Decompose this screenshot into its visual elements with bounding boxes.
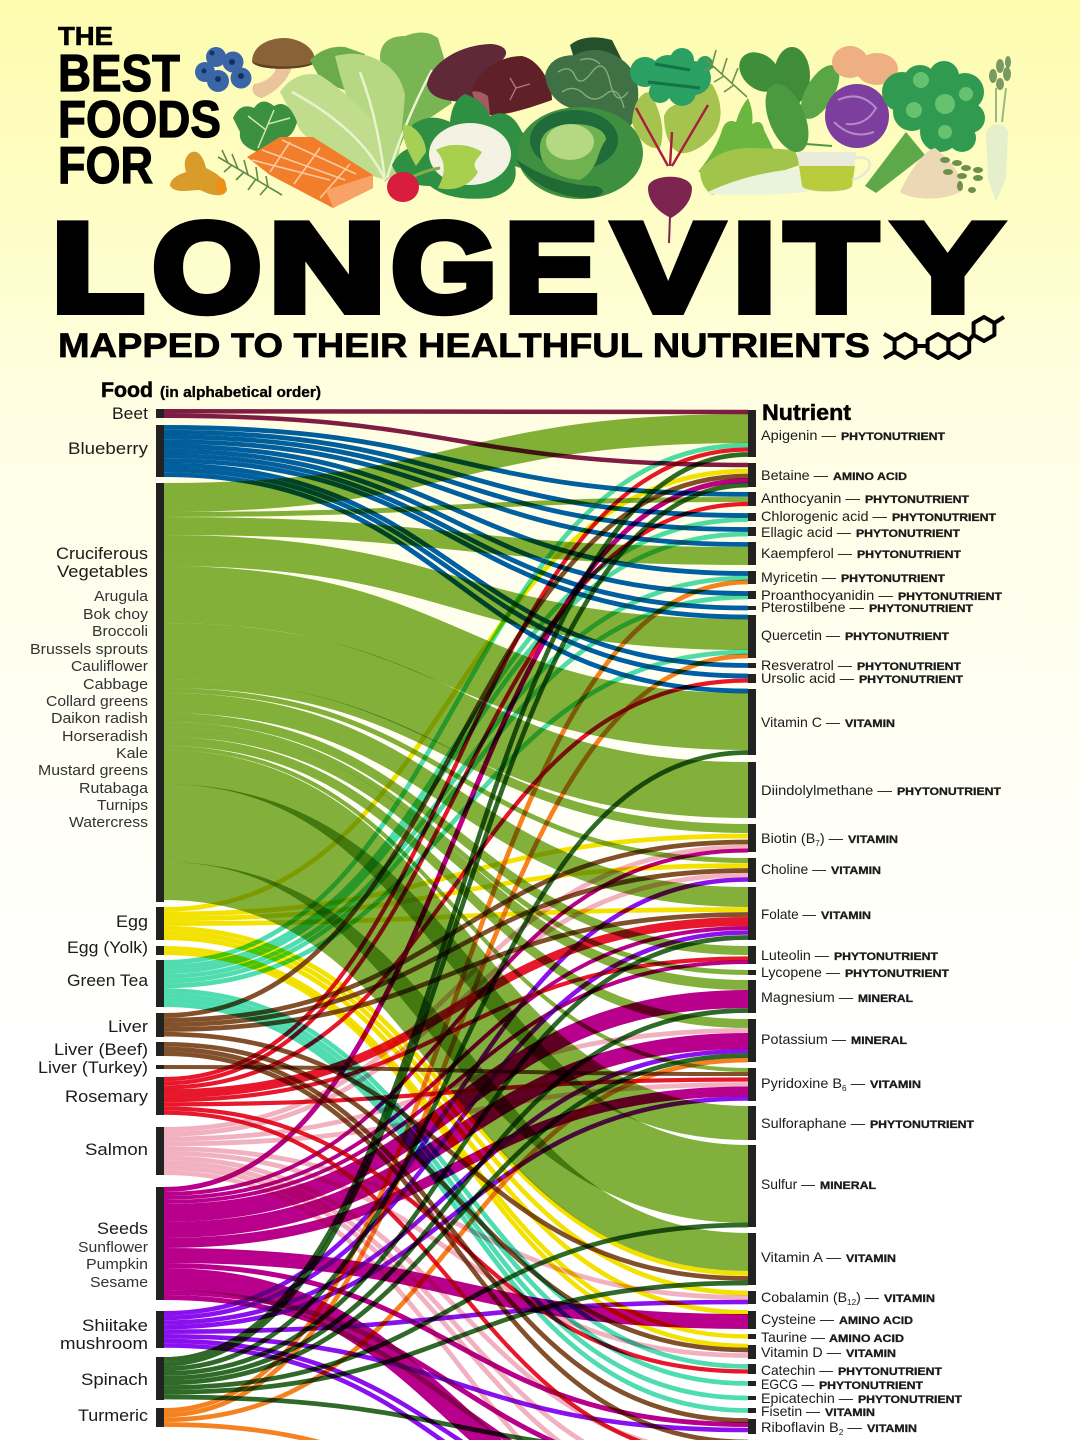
food labels: Broccoli: [92, 623, 148, 640]
nutrient labels: VITAMIN: [831, 865, 881, 877]
nutrient labels: Betaine —: [761, 467, 828, 483]
nutrient labels: —: [847, 1075, 865, 1091]
title: longevity: V: [614, 197, 722, 338]
nutrient labels: PHYTONUTRIENT: [841, 573, 945, 585]
nutrient labels: AMINO ACID: [833, 471, 907, 483]
food labels: Vegetables: [57, 563, 148, 581]
icon: eggs: [832, 46, 898, 85]
nutrient labels: VITAMIN: [867, 1423, 917, 1435]
nutrient labels: VITAMIN: [846, 1348, 896, 1360]
food labels: Daikon radish: [51, 710, 148, 727]
food labels: Horseradish: [62, 728, 148, 745]
title: longevity: T: [785, 197, 877, 338]
nutrient labels: VITAMIN: [848, 834, 898, 846]
nutrient labels: Sulforaphane —: [761, 1115, 865, 1131]
food labels: [30, 405, 149, 1425]
food labels: Cabbage: [83, 676, 148, 693]
nutrient labels: Ellagic acid —: [761, 524, 851, 540]
nutrient labels: Diindolylmethane —: [761, 782, 892, 798]
nutrient labels: ) —: [820, 830, 843, 846]
icon: spinach: [731, 44, 847, 158]
nutrient labels: PHYTONUTRIENT: [865, 494, 969, 506]
nutrient labels: AMINO ACID: [829, 1333, 904, 1345]
icon: blueberries: [195, 47, 252, 92]
icon: seeds: [900, 148, 983, 199]
food labels: Egg (Yolk): [67, 939, 148, 957]
food labels: Kale: [116, 745, 148, 762]
nutrient labels: ) —: [856, 1289, 879, 1305]
nutrient labels: Vitamin A —: [761, 1249, 841, 1265]
title: longevity: E: [505, 197, 598, 338]
food labels: Spinach: [81, 1371, 148, 1389]
nutrient labels: Kaempferol —: [761, 545, 852, 561]
title: the best foods for: THE: [58, 21, 113, 51]
nutrient labels: PHYTONUTRIENT: [857, 549, 961, 561]
food node bars: [156, 409, 164, 1427]
icon: brussels sprouts: [630, 48, 713, 106]
food labels: Rutabaga: [79, 780, 149, 797]
food labels: Sesame: [90, 1274, 148, 1291]
sankey diagram: food to nutrient flows: [164, 411, 748, 1440]
flows: egg yolk: [164, 948, 748, 1346]
nutrient labels: MINERAL: [851, 1035, 907, 1047]
food labels: Liver: [108, 1018, 149, 1036]
column heading: nutrient: Nutrient: [762, 400, 852, 425]
nutrient labels: Cysteine —: [761, 1311, 834, 1327]
nutrient labels: PHYTONUTRIENT: [859, 674, 963, 686]
icon: kale: [233, 101, 297, 152]
nutrient labels: PHYTONUTRIENT: [869, 603, 973, 615]
icon: lettuce: [280, 32, 452, 182]
nutrient labels: PHYTONUTRIENT: [898, 591, 1002, 603]
food labels: Liver (Turkey): [38, 1059, 148, 1077]
icon: broccoli: [865, 61, 985, 193]
nutrient labels: Folate —: [761, 906, 816, 922]
nutrient labels: Myricetin —: [761, 569, 836, 585]
food labels: Collard greens: [46, 693, 148, 710]
nutrient labels: 6: [842, 1084, 847, 1093]
nutrient labels: 7: [815, 839, 820, 848]
nutrient labels: VITAMIN: [870, 1079, 921, 1091]
nutrient labels: Magnesium —: [761, 989, 853, 1005]
nutrient labels: PHYTONUTRIENT: [858, 1394, 962, 1406]
icon: salmon: [247, 137, 373, 208]
icon: daikon: [986, 56, 1011, 202]
title: the best foods for: [58, 21, 221, 195]
title: longevity: L: [52, 197, 144, 338]
flows: cruciferous vegetables: [164, 428, 748, 1252]
flows: shiitake mushroom: [164, 880, 748, 1440]
icon: molecule: [884, 317, 1004, 358]
icon: napa cabbage: [700, 148, 807, 195]
food labels: Green Tea: [67, 972, 149, 990]
nutrient labels: PHYTONUTRIENT: [857, 661, 961, 673]
nutrient labels: Luteolin —: [761, 947, 829, 963]
food labels: Mustard greens: [38, 762, 148, 779]
nutrient labels: PHYTONUTRIENT: [838, 1366, 942, 1378]
nutrient labels: Biotin (B: [761, 830, 814, 846]
flows: blueberry: [164, 427, 748, 691]
flows: egg: [164, 471, 748, 1312]
title: longevity: G: [391, 197, 497, 338]
nutrient labels: Chlorogenic acid —: [761, 508, 887, 524]
icon: rosemary sprig: [703, 50, 747, 97]
nutrient labels: VITAMIN: [884, 1293, 935, 1305]
nutrient labels: Fisetin —: [761, 1403, 820, 1419]
nutrient labels: Potassium —: [761, 1031, 846, 1047]
nutrient labels: Catechin —: [761, 1362, 833, 1378]
food labels: Turnips: [97, 797, 148, 814]
food labels: Brussels sprouts: [30, 641, 148, 658]
food labels: Watercress: [69, 814, 148, 831]
nutrient labels: Epicatechin —: [761, 1390, 853, 1406]
title: the best foods for: BEST: [58, 45, 180, 103]
column heading: food: Food: [101, 379, 153, 402]
nutrient labels: [761, 427, 1002, 1437]
food labels: mushroom: [60, 1335, 148, 1353]
icon: mushroom: [252, 38, 315, 98]
flows: rosemary: [164, 450, 748, 1440]
nutrient labels: Pterostilbene —: [761, 599, 864, 615]
nutrient labels: PHYTONUTRIENT: [845, 631, 949, 643]
food labels: Shiitake: [82, 1317, 148, 1335]
food labels: Pumpkin: [86, 1256, 148, 1273]
food labels: Bok choy: [83, 606, 149, 623]
nutrient labels: Lycopene —: [761, 964, 840, 980]
food labels: Blueberry: [68, 440, 149, 458]
nutrient labels: MINERAL: [820, 1180, 876, 1192]
flows: liver: [164, 476, 748, 1278]
icon: red cabbage: [825, 84, 889, 148]
food labels: Cruciferous: [56, 545, 148, 563]
food labels: Arugula: [94, 588, 149, 605]
food labels: Cauliflower: [71, 658, 148, 675]
icon: radish: [387, 168, 440, 202]
nutrient node bars: [748, 410, 756, 1434]
nutrient labels: Cobalamin (B: [761, 1289, 846, 1305]
nutrient labels: PHYTONUTRIENT: [870, 1119, 974, 1131]
title: the best foods for: FOR: [58, 137, 153, 195]
nutrient labels: Quercetin —: [761, 627, 840, 643]
nutrient labels: PHYTONUTRIENT: [897, 786, 1001, 798]
food labels: Turmeric: [78, 1407, 148, 1425]
flows: spinach: [164, 454, 748, 1440]
nutrient labels: Resveratrol —: [761, 657, 852, 673]
title: longevity: [52, 197, 1001, 338]
icon: beet: [632, 84, 721, 243]
food labels: Liver (Beef): [54, 1041, 148, 1059]
flows: turmeric: [164, 582, 748, 1440]
icon: dark kale: [545, 37, 638, 130]
nutrient labels: PHYTONUTRIENT: [834, 951, 938, 963]
nutrient labels: Sulfur —: [761, 1176, 815, 1192]
nutrient labels: VITAMIN: [825, 1407, 875, 1419]
nutrient labels: Ursolic acid —: [761, 670, 854, 686]
flows: liver beef: [164, 1044, 748, 1440]
food labels: Egg: [116, 913, 148, 931]
nutrient labels: PHYTONUTRIENT: [856, 528, 960, 540]
subtitle: MAPPED TO THEIR HEALTHFUL NUTRIENTS: [58, 327, 870, 365]
icon: turmeric: [170, 152, 227, 195]
food labels: Seeds: [97, 1220, 148, 1238]
icon: cauliflower: [392, 94, 542, 199]
icon: liver: [427, 44, 552, 115]
nutrient labels: 12: [847, 1298, 857, 1307]
title: longevity: N: [269, 197, 386, 338]
flows: green tea: [164, 445, 748, 1410]
food labels: Salmon: [85, 1141, 148, 1159]
icon: arugula: [698, 98, 783, 172]
nutrient labels: VITAMIN: [846, 1253, 896, 1265]
nutrient labels: Apigenin —: [761, 427, 836, 443]
illustration: row of foods: [170, 32, 1011, 243]
nutrient labels: Vitamin C —: [761, 714, 840, 730]
icon: rosemary: [218, 150, 282, 195]
icon: green tea cup: [797, 152, 870, 192]
flows: liver turkey: [164, 1067, 748, 1074]
nutrient labels: PHYTONUTRIENT: [819, 1380, 923, 1392]
title: longevity: I: [733, 197, 776, 338]
nutrient labels: 2: [839, 1428, 844, 1437]
title: the best foods for: FOODS: [58, 91, 221, 149]
title: longevity: O: [153, 197, 261, 338]
nutrient labels: AMINO ACID: [839, 1315, 913, 1327]
nutrient labels: PHYTONUTRIENT: [892, 512, 996, 524]
nutrient labels: EGCG —: [761, 1376, 814, 1392]
nutrient labels: Anthocyanin —: [761, 490, 860, 506]
food labels: Sunflower: [78, 1239, 148, 1256]
column heading: food: [101, 379, 321, 402]
nutrient labels: Taurine —: [761, 1329, 825, 1345]
icon: cabbage: [517, 107, 643, 199]
title: longevity: Y: [894, 197, 1002, 338]
nutrient labels: Riboflavin B: [761, 1419, 836, 1435]
column heading: food: (in alphabetical order): [160, 385, 321, 401]
flows: beet: [164, 411, 748, 465]
food labels: Beet: [112, 405, 148, 423]
nutrient labels: Choline —: [761, 861, 826, 877]
nutrient labels: PHYTONUTRIENT: [845, 968, 949, 980]
nutrient labels: PHYTONUTRIENT: [841, 431, 945, 443]
nutrient labels: —: [843, 1419, 862, 1435]
nutrient labels: VITAMIN: [821, 910, 871, 922]
food labels: Rosemary: [65, 1088, 149, 1106]
flows: seeds: [164, 480, 748, 1440]
nutrient labels: Proanthocyanidin —: [761, 587, 893, 603]
nutrient labels: Pyridoxine B: [761, 1075, 840, 1091]
nutrient labels: MINERAL: [858, 993, 913, 1005]
nutrient labels: Vitamin D —: [761, 1344, 841, 1360]
flows: salmon: [164, 847, 748, 1440]
nutrient labels: VITAMIN: [845, 718, 895, 730]
